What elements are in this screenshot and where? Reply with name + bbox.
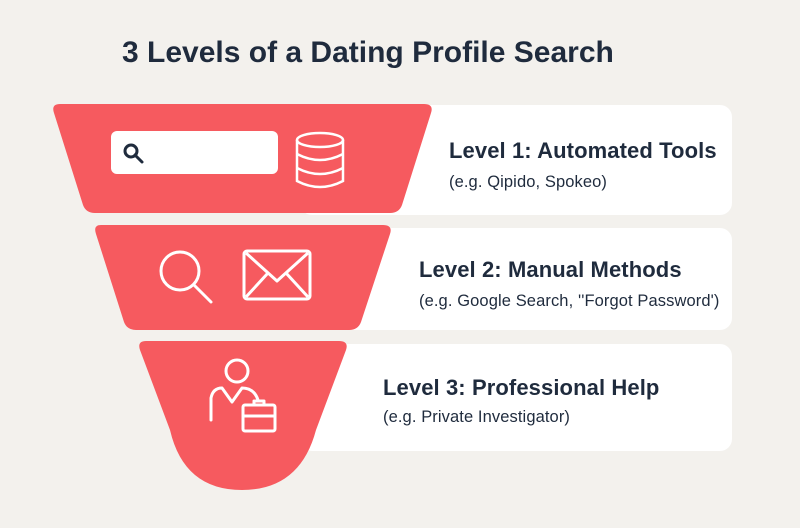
funnel segment 2 [95,225,391,330]
icon: search bar [111,131,278,174]
text: level 3 [383,375,659,426]
text: (e.g. Google Search, ''Forgot Password') [419,292,720,310]
title: 3 Levels of a Dating Profile Search [122,36,614,69]
funnel segment 1 [53,104,432,213]
card: level 2 [300,228,732,330]
text: (e.g. Private Investigator) [383,408,570,426]
text: Level 3: Professional Help [383,375,659,400]
card: level 3 [300,344,732,451]
funnel segment 3 [139,341,347,490]
icon: database [297,133,343,187]
icon: person with briefcase [211,360,275,431]
text: Level 2: Manual Methods [419,257,682,282]
card: level 1 [300,105,732,215]
text: Level 1: Automated Tools [449,138,717,163]
icon: envelope [244,251,310,299]
text: level 2 [419,257,720,310]
icon: magnifier [161,252,211,302]
text: (e.g. Qipido, Spokeo) [449,173,607,191]
text: level 1 [449,138,717,191]
